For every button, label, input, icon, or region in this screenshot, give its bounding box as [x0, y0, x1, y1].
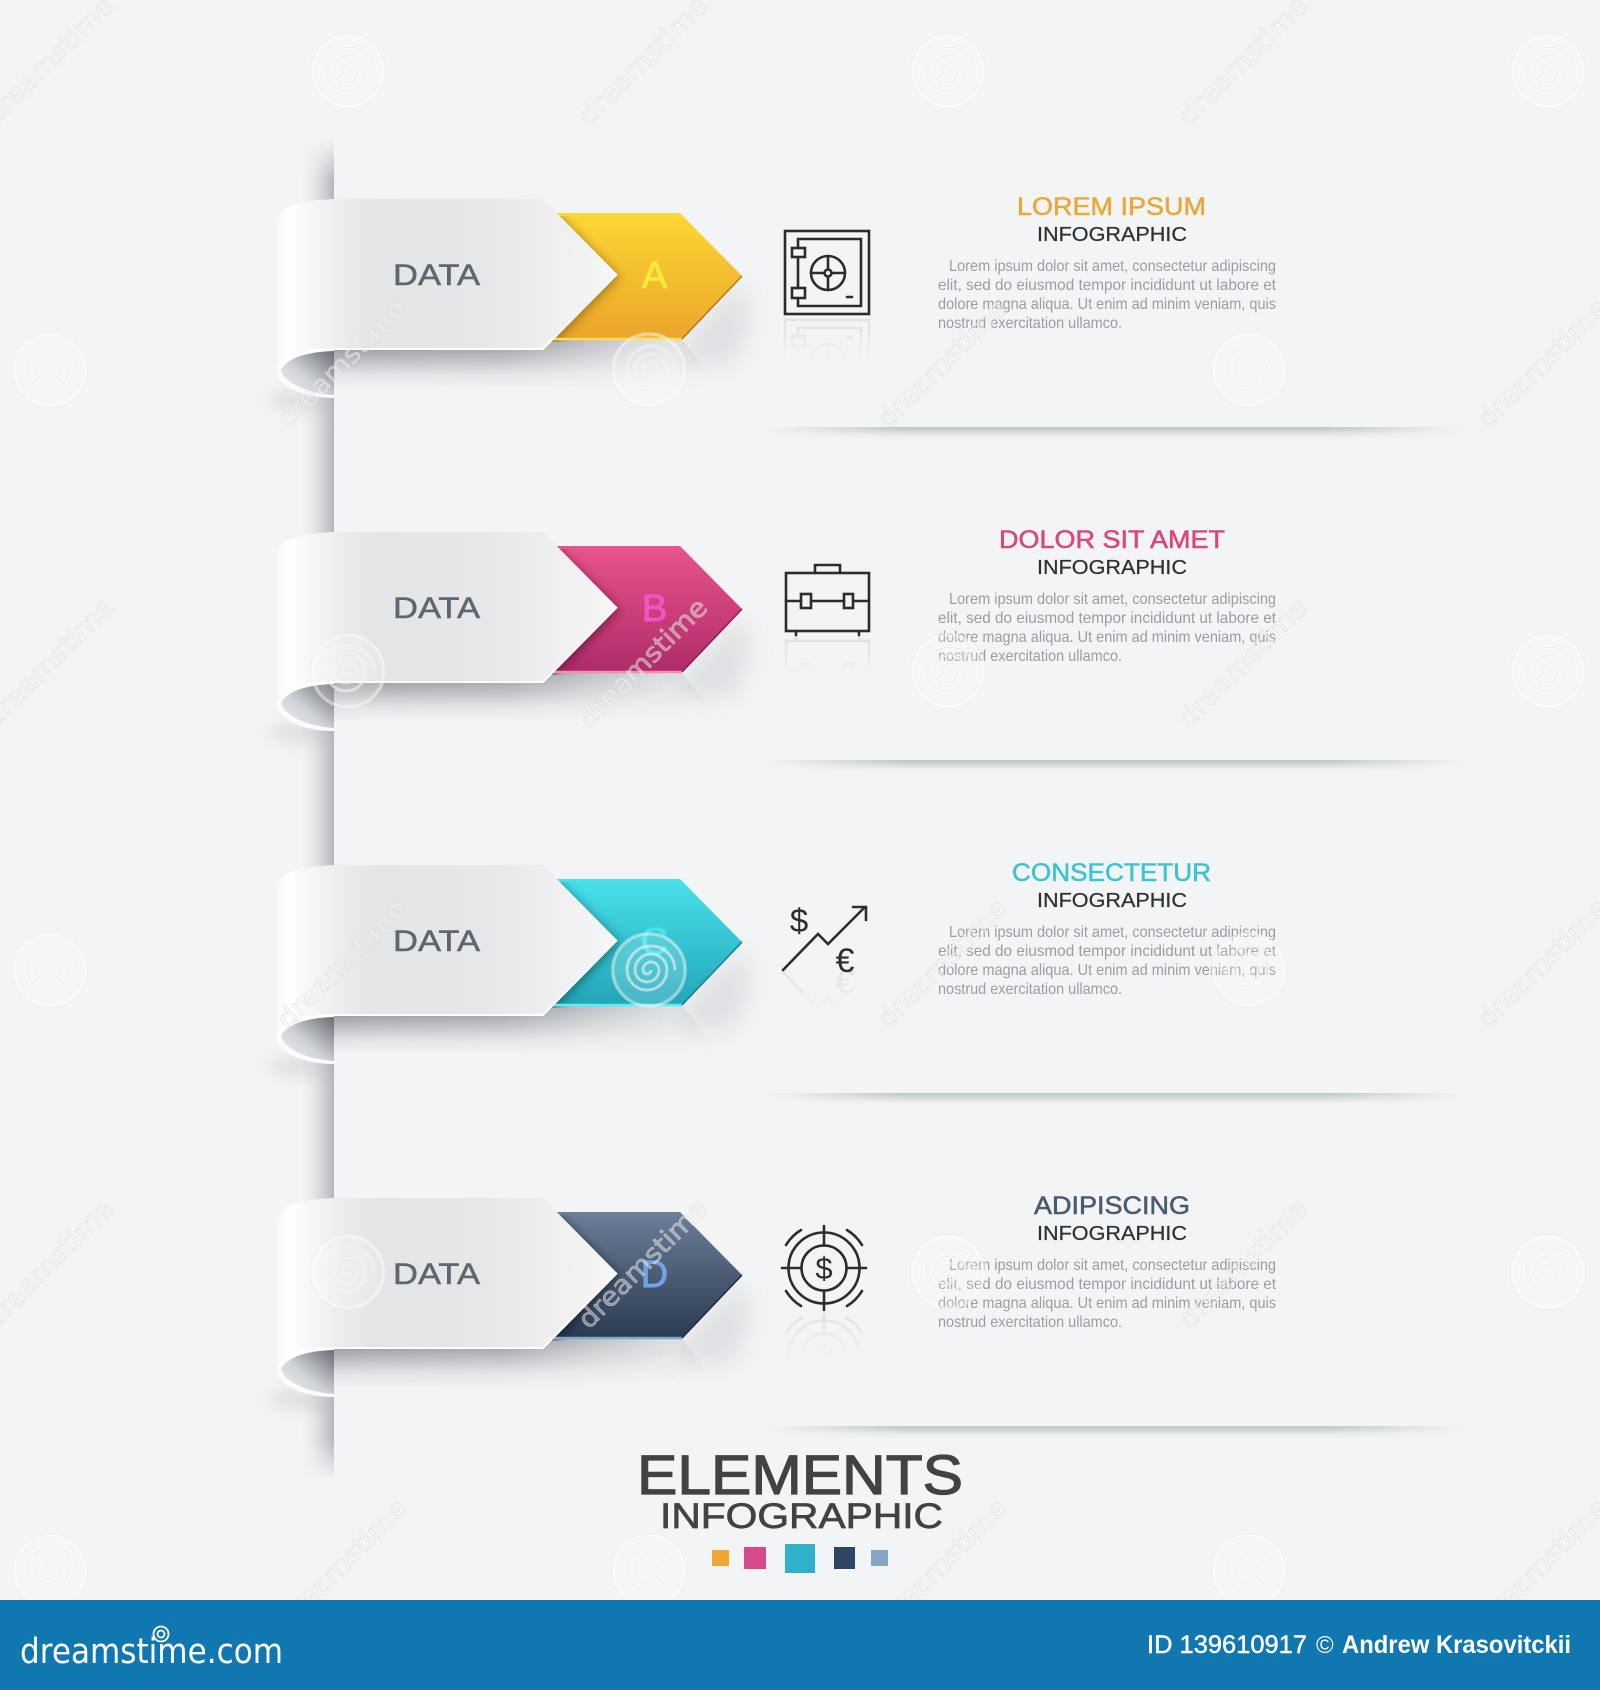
- icon: safe: [785, 231, 869, 314]
- text block A: nostrud exercitation ullamco.: [938, 315, 1122, 332]
- text block D: [938, 1257, 1277, 1331]
- reflection of safe icon: [778, 316, 878, 406]
- text block A: [938, 258, 1277, 332]
- icon: briefcase: [786, 565, 869, 635]
- reflection of target icon: [778, 1314, 878, 1406]
- watermark text: dreamstime: [272, 894, 413, 1035]
- divider shadow D: [789, 1426, 1441, 1436]
- text block C: nostrud exercitation ullamco.: [938, 981, 1122, 998]
- watermark text: dreamstime: [272, 1494, 413, 1635]
- reflection of chart icon: [778, 962, 878, 1048]
- watermark text: dreamstime: [872, 294, 1013, 435]
- subheading D: INFOGRAPHIC: [1037, 1222, 1187, 1245]
- watermark text: dreamstime: [1472, 1494, 1600, 1635]
- subheading B: INFOGRAPHIC: [1037, 556, 1187, 579]
- text block D: Lorem ipsum dolor sit amet, consectetur adipiscing: [949, 1257, 1276, 1274]
- arrow C: [552, 879, 742, 1008]
- letter A: A: [642, 255, 668, 297]
- watermark text: dreamstime: [573, 1194, 714, 1335]
- footer image id: ID 139610917: [1147, 1631, 1307, 1659]
- text block B: nostrud exercitation ullamco.: [938, 648, 1122, 665]
- subheading C: INFOGRAPHIC: [1037, 889, 1187, 912]
- paper ribbon B: [277, 532, 617, 731]
- text block C: dolore magna aliqua. Ut enim ad minim veniam, quis: [938, 962, 1276, 979]
- icon: currency growth chart: [783, 902, 866, 980]
- footer bar: [0, 1600, 1600, 1690]
- divider shadow B: [789, 760, 1441, 770]
- paper ribbon A: [277, 199, 617, 398]
- heading A: LOREM IPSUM: [1017, 193, 1206, 221]
- watermark text: dreamstime: [573, 593, 714, 734]
- heading C: CONSECTETUR: [1012, 859, 1211, 887]
- divider shadow C: [789, 1093, 1441, 1102]
- text block A: Lorem ipsum dolor sit amet, consectetur adipiscing: [949, 258, 1276, 275]
- ribbon shadow A: [269, 280, 752, 410]
- divider shadow A: [789, 427, 1441, 436]
- main title: ELEMENTS: ELEMENTS: [637, 1443, 963, 1506]
- vertical edge shadow: [310, 145, 334, 1475]
- row D: ribbon and details: [269, 1192, 1465, 1431]
- text block B: dolore magna aliqua. Ut enim ad minim veniam, quis: [938, 629, 1276, 646]
- text block B: [938, 591, 1277, 665]
- text block D: dolore magna aliqua. Ut enim ad minim veniam, quis: [938, 1295, 1276, 1312]
- reflection of briefcase icon: [778, 637, 878, 713]
- arrow A: [552, 213, 742, 342]
- watermark text: dreamstime: [1173, 0, 1314, 132]
- label DATA D: DATA: [393, 1258, 480, 1291]
- text block D: nostrud exercitation ullamco.: [938, 1314, 1122, 1331]
- text block C: Lorem ipsum dolor sit amet, consectetur adipiscing: [949, 924, 1276, 941]
- paper ribbon C: [277, 865, 617, 1064]
- text block C: [938, 924, 1277, 998]
- letter C: C: [641, 921, 668, 963]
- letter D: D: [641, 1254, 668, 1296]
- row C: ribbon and details: [269, 859, 1465, 1098]
- watermark text: dreamstime: [872, 894, 1013, 1035]
- watermark text: dreamstime: [272, 294, 413, 435]
- text block C: elit, sed do eiusmod tempor incididunt ut labore et: [938, 943, 1277, 960]
- watermark text: dreamstime: [872, 1494, 1013, 1635]
- watermark text: dreamstime: [1472, 294, 1600, 435]
- arrow B: [552, 546, 742, 675]
- main subtitle: INFOGRAPHIC: INFOGRAPHIC: [660, 1497, 943, 1536]
- ribbon shadow B: [269, 613, 752, 743]
- label DATA B: DATA: [393, 592, 480, 625]
- footer author: Andrew Krasovitckii: [1342, 1631, 1571, 1659]
- watermark text: dreamstime: [1173, 593, 1314, 734]
- watermark text: dreamstime: [1173, 1194, 1314, 1335]
- row A: ribbon and details: [269, 193, 1465, 432]
- text block A: elit, sed do eiusmod tempor incididunt ut labore et: [938, 277, 1277, 294]
- footer logo text: dreamstime.com: [20, 1632, 283, 1672]
- subheading A: INFOGRAPHIC: [1037, 223, 1187, 246]
- letter B: B: [642, 588, 667, 630]
- ribbon shadow D: [269, 1279, 752, 1409]
- footer copyright mark: ©: [1316, 1632, 1334, 1659]
- watermark text: dreamstime: [1472, 894, 1600, 1035]
- heading D: ADIPISCING: [1034, 1192, 1190, 1220]
- text block A: dolore magna aliqua. Ut enim ad minim veniam, quis: [938, 296, 1276, 313]
- colour squares: [712, 1544, 888, 1573]
- watermark text: dreamstime: [573, 0, 714, 132]
- text block B: Lorem ipsum dolor sit amet, consectetur adipiscing: [949, 591, 1276, 608]
- label DATA C: DATA: [393, 925, 480, 958]
- arrow D: [552, 1212, 742, 1341]
- footer logo spiral: [154, 1626, 168, 1642]
- label DATA A: DATA: [393, 259, 480, 292]
- heading B: DOLOR SIT AMET: [999, 526, 1225, 554]
- row B: ribbon and details: [269, 526, 1465, 765]
- text block D: elit, sed do eiusmod tempor incididunt ut labore et: [938, 1276, 1277, 1293]
- ribbon shadow C: [269, 946, 752, 1076]
- text block B: elit, sed do eiusmod tempor incididunt ut labore et: [938, 610, 1277, 627]
- icon: target with dollar: [782, 1226, 866, 1310]
- paper ribbon D: [277, 1198, 617, 1397]
